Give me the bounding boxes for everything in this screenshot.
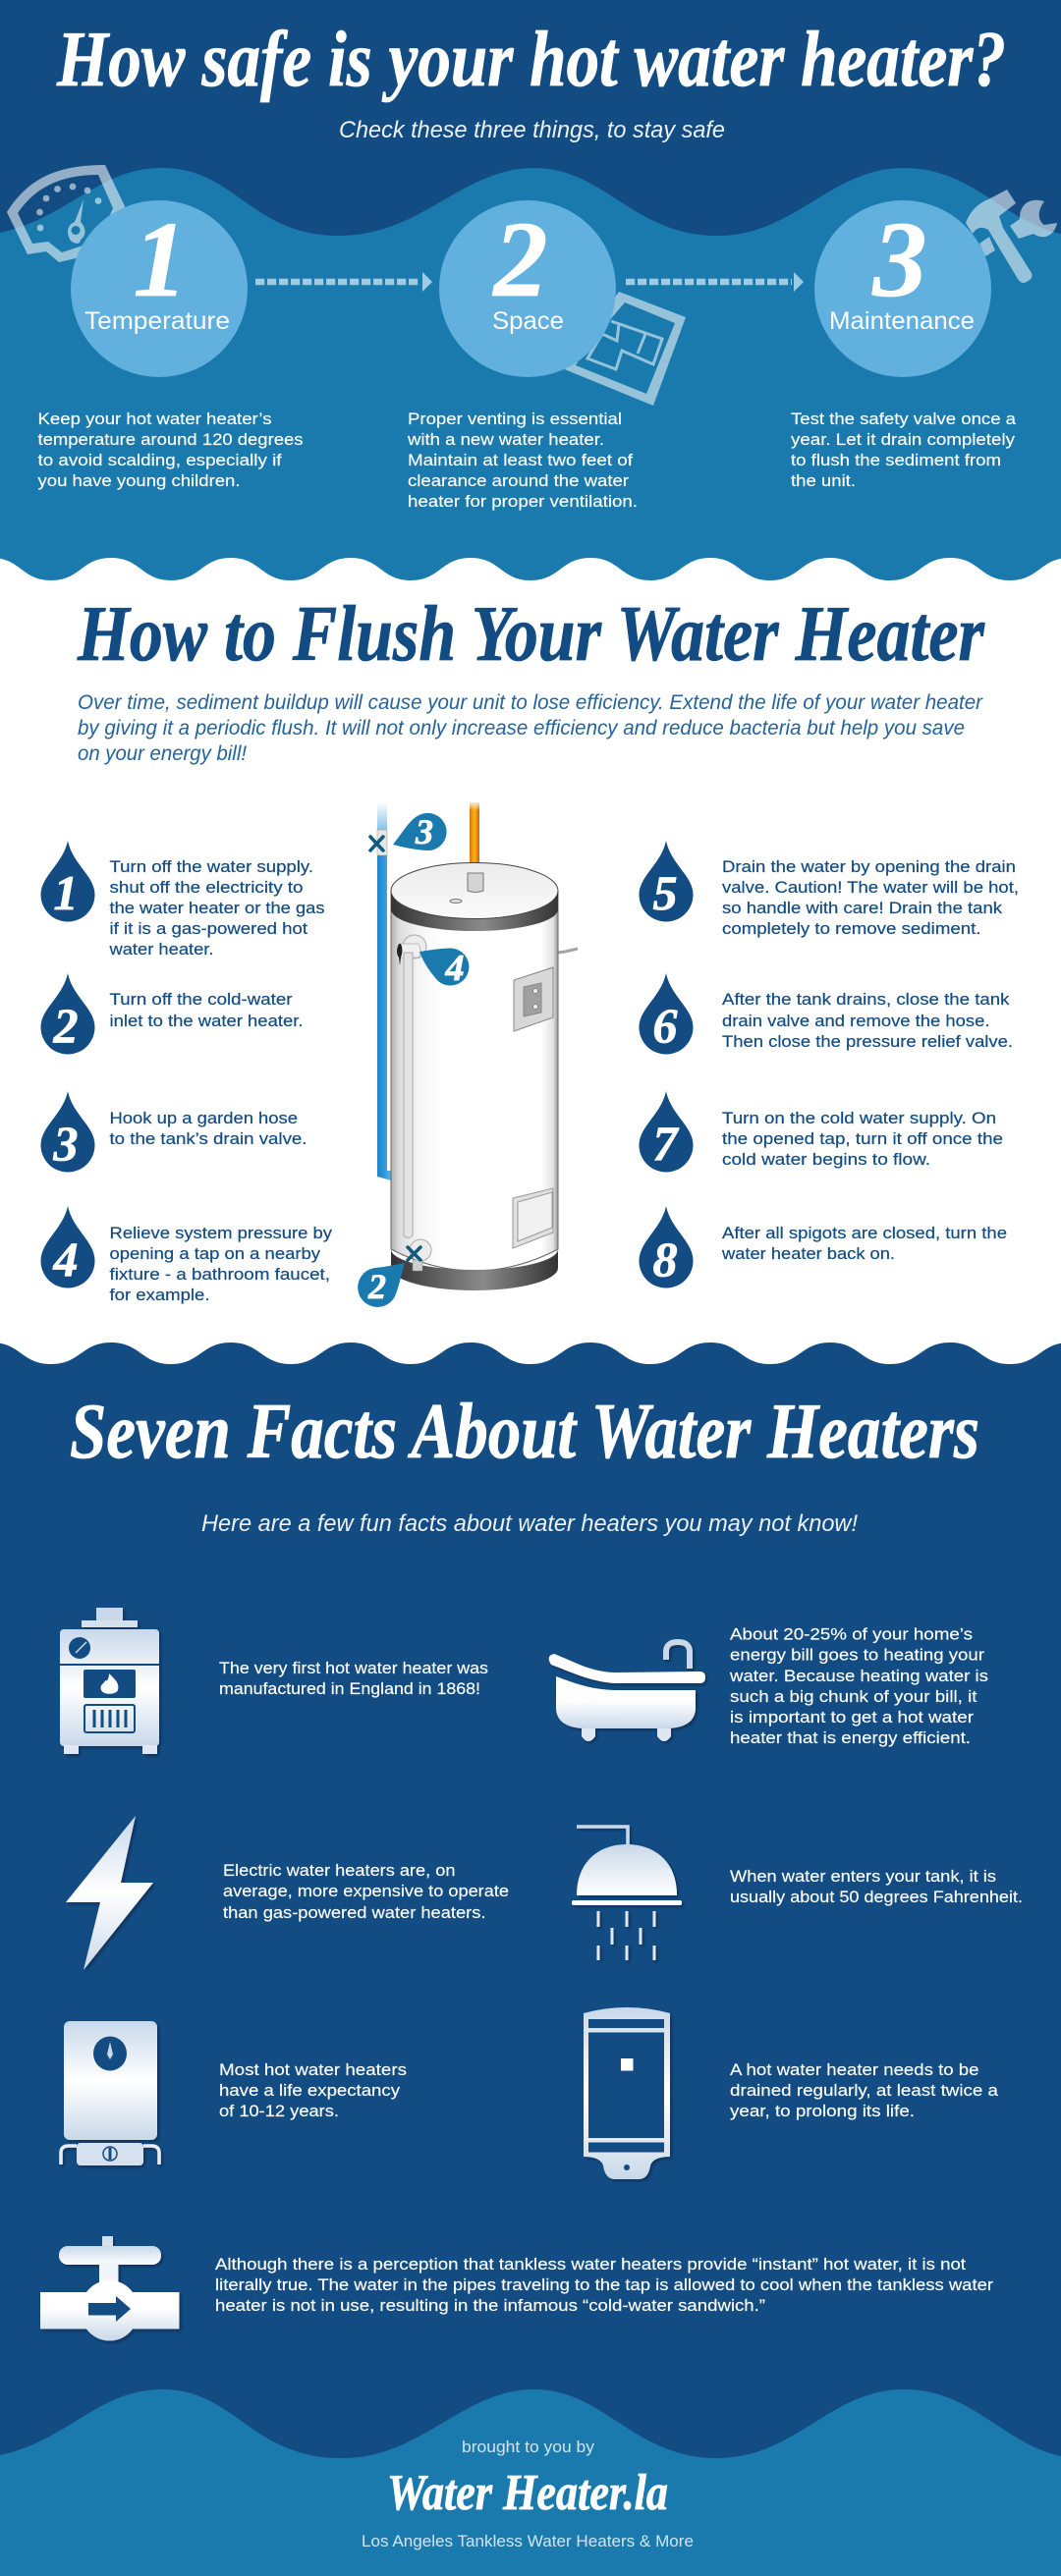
callout 4 — [419, 948, 469, 989]
text: space tip: clearance around the water — [408, 471, 629, 490]
step 1 — [41, 841, 324, 959]
icon: lightning bolt — [66, 1816, 153, 1970]
step 3: Hook up a garden hose — [110, 1109, 298, 1127]
callout 2: 2 — [367, 1267, 386, 1306]
flue hole — [450, 900, 462, 904]
text: space tip: Proper venting is essential — [408, 410, 622, 428]
text: temperature tip: temperature around 120 degrees — [37, 430, 303, 449]
relief tube — [397, 935, 426, 1237]
step 7: cold water begins to flow. — [722, 1150, 930, 1169]
text: space tip: Maintain at least two feet of — [408, 451, 633, 469]
fact: drain regularly: drained regularly, at least twice a — [730, 2081, 999, 2100]
fact: 50 degrees: usually about 50 degrees Fahrenheit. — [730, 1888, 1023, 1906]
icon: storage tank — [584, 2007, 670, 2179]
step 5: valve. Caution! The water will be hot, — [722, 878, 1019, 897]
step 2 — [41, 973, 303, 1055]
step 5 — [639, 841, 1019, 938]
step 5: so handle with care! Drain the tank — [722, 899, 1003, 917]
step circle 1: temperature — [71, 199, 248, 377]
fact: 50 degrees: When water enters your tank, it is — [730, 1867, 996, 1886]
fact: drain regularly: A hot water heater needs to be — [730, 2060, 978, 2079]
tank body — [391, 891, 558, 1271]
fact: first heater: manufactured in England in 1868! — [219, 1679, 480, 1698]
arrow: step 1 to step 2 — [255, 272, 432, 292]
fact: energy bill: such a big chunk of your bill, it — [730, 1687, 977, 1706]
fact: energy bill: is important to get a hot water — [730, 1708, 974, 1726]
dark facts section with scalloped top — [0, 1343, 1061, 2576]
icon: shower — [572, 1827, 682, 1960]
step 5: completely to remove sediment. — [722, 919, 980, 938]
step 5: 5 — [652, 865, 678, 920]
step 4: 4 — [53, 1232, 79, 1287]
control panel — [514, 967, 553, 1031]
fact: tankless: literally true. The water in the pipes traveling to the tap is allowed to cool when the tankless water — [215, 2275, 993, 2294]
icon: bathtub — [549, 1642, 705, 1741]
step 6: drain valve and remove the hose. — [722, 1012, 990, 1030]
fact: energy bill: About 20-25% of your home’s — [730, 1624, 973, 1644]
text: maintenance tip: year. Let it drain completely — [791, 430, 1016, 449]
step circle 2: space — [439, 199, 616, 377]
step 3 — [41, 1091, 307, 1172]
fact: drain regularly — [730, 2060, 999, 2120]
step circle 3: maintenance: 3 — [872, 199, 927, 319]
fact: drain regularly: year, to prolong its life. — [730, 2102, 915, 2120]
step 6 — [639, 973, 1013, 1055]
footer credit: brought to you by — [462, 2438, 595, 2456]
fact: life expectancy: Most hot water heaters — [219, 2060, 407, 2079]
step 2: 2 — [53, 998, 79, 1053]
callout 3 — [393, 812, 447, 851]
callout 4: 4 — [444, 948, 464, 989]
step 4: Relieve system pressure by — [110, 1224, 333, 1242]
icon: floor plan — [562, 292, 686, 406]
footer tagline: Los Angeles Tankless Water Heaters & More — [362, 2532, 694, 2550]
fact: energy bill — [729, 1624, 988, 1747]
step 7 — [639, 1091, 1003, 1172]
step 4: fixture - a bathroom faucet, — [110, 1265, 330, 1284]
fact: life expectancy — [219, 2060, 407, 2120]
fact: first heater — [219, 1659, 488, 1698]
bottom band — [391, 1249, 558, 1290]
text: space tip: heater for proper ventilation. — [408, 492, 638, 511]
cold water pipe — [377, 802, 391, 1180]
step 7: the opened tap, turn it off once the — [722, 1129, 1003, 1148]
text: maintenance tip — [791, 410, 1017, 490]
step 4 — [41, 1206, 333, 1304]
wire — [551, 949, 578, 954]
step 6: 6 — [652, 998, 678, 1053]
fact: tankless: heater is not in use, resulting in the infamous “cold-water sandwich.” — [215, 2296, 765, 2315]
intro paragraph — [78, 691, 983, 765]
arrow: step 2 to step 3 — [626, 272, 804, 292]
blue handles — [370, 837, 420, 1260]
footer wave — [0, 2389, 1061, 2576]
fact: electric heaters — [223, 1861, 509, 1922]
fact: tankless — [215, 2255, 993, 2315]
footer logo: Water Heater.la — [387, 2465, 668, 2521]
step 6: Then close the pressure relief valve. — [722, 1032, 1013, 1051]
drain valve — [410, 1239, 431, 1271]
step circle 1: temperature: Temperature — [84, 307, 230, 335]
step 4: opening a tap on a nearby — [110, 1244, 321, 1263]
step circle 1: temperature: 1 — [134, 199, 187, 319]
step 1: the water heater or the gas — [110, 899, 324, 917]
top band — [391, 891, 558, 931]
fact: energy bill: heater that is energy efficient. — [730, 1728, 971, 1747]
step 7: 7 — [652, 1116, 680, 1171]
step 1: if it is a gas-powered hot — [110, 919, 307, 938]
fact: energy bill: water. Because heating water is — [729, 1667, 988, 1685]
fact: electric heaters: Electric water heaters are, on — [223, 1861, 456, 1880]
fact: energy bill: energy bill goes to heating your — [730, 1646, 984, 1664]
text: space tip: with a new water heater. — [407, 430, 604, 449]
callout 2 — [358, 1263, 405, 1307]
step 8 — [639, 1206, 1007, 1288]
step 4: for example. — [110, 1286, 210, 1304]
intro paragraph: Over time, sediment buildup will cause your unit to lose efficiency. Extend the life of your water heater — [78, 691, 983, 714]
intro paragraph: by giving it a periodic flush. It will not only increase efficiency and reduce bacteria but help you save — [78, 717, 965, 740]
icon: tankless heater — [61, 2021, 159, 2165]
text: temperature tip: Keep your hot water heater’s — [37, 410, 271, 428]
text: maintenance tip: the unit. — [791, 471, 856, 490]
callout 3: 3 — [415, 812, 433, 851]
top section wave — [0, 168, 1061, 589]
intro paragraph: on your energy bill! — [78, 742, 247, 765]
step 1: water heater. — [108, 940, 214, 959]
step 3: to the tank’s drain valve. — [110, 1129, 307, 1148]
step circle 2: space: Space — [492, 307, 564, 335]
gas pipe — [469, 800, 480, 876]
fitting — [468, 873, 483, 892]
facts subtitle: Here are a few fun facts about water heaters you may not know! — [201, 1510, 858, 1537]
fact: tankless: Although there is a perception that tankless water heaters provide “instant” hot water, it is not — [215, 2255, 966, 2274]
step 7: Turn on the cold water supply. On — [722, 1109, 996, 1127]
fact: life expectancy: of 10-12 years. — [219, 2102, 339, 2120]
fact: 50 degrees — [730, 1867, 1023, 1906]
text: temperature tip: to avoid scalding, especially if — [37, 451, 282, 469]
step 2: Turn off the cold-water — [110, 990, 293, 1009]
step 1: shut off the electricity to — [110, 878, 303, 897]
text: maintenance tip: Test the safety valve once a — [791, 410, 1017, 428]
icon: temperature gauge — [7, 165, 125, 265]
icon: valve with arrow — [40, 2236, 179, 2341]
fact: electric heaters: average, more expensive to operate — [223, 1882, 509, 1900]
text: temperature tip: you have young children. — [37, 471, 240, 490]
step 8: After all spigots are closed, turn the — [722, 1224, 1007, 1242]
text: space tip — [407, 410, 638, 511]
lower access panel — [513, 1188, 553, 1248]
icon: hammer and wrench — [966, 190, 1057, 283]
text: maintenance tip: to flush the sediment from — [791, 451, 1001, 469]
icon: boiler — [60, 1608, 159, 1754]
step 8: 8 — [652, 1232, 678, 1287]
step circle 2: space: 2 — [491, 199, 548, 319]
step 5: Drain the water by opening the drain — [722, 857, 1016, 876]
water heater illustration — [358, 800, 578, 1307]
step 8: water heater back on. — [721, 1244, 895, 1263]
white section with scalloped top — [0, 558, 1061, 1375]
text: temperature tip — [37, 410, 303, 490]
fact: life expectancy: have a life expectancy — [219, 2081, 401, 2100]
fact: first heater: The very first hot water heater was — [219, 1659, 488, 1677]
step 3: 3 — [53, 1116, 79, 1171]
subtitle: Check these three things, to stay safe — [339, 117, 725, 143]
step circle 3: maintenance — [814, 199, 991, 377]
step 2: inlet to the water heater. — [110, 1012, 303, 1030]
step 6: After the tank drains, close the tank — [722, 990, 1010, 1009]
lid — [391, 862, 558, 919]
step 1: Turn off the water supply. — [110, 857, 313, 876]
step 1: 1 — [53, 865, 79, 920]
fact: electric heaters: than gas-powered water heaters. — [223, 1903, 485, 1922]
step circle 3: maintenance: Maintenance — [829, 307, 975, 335]
